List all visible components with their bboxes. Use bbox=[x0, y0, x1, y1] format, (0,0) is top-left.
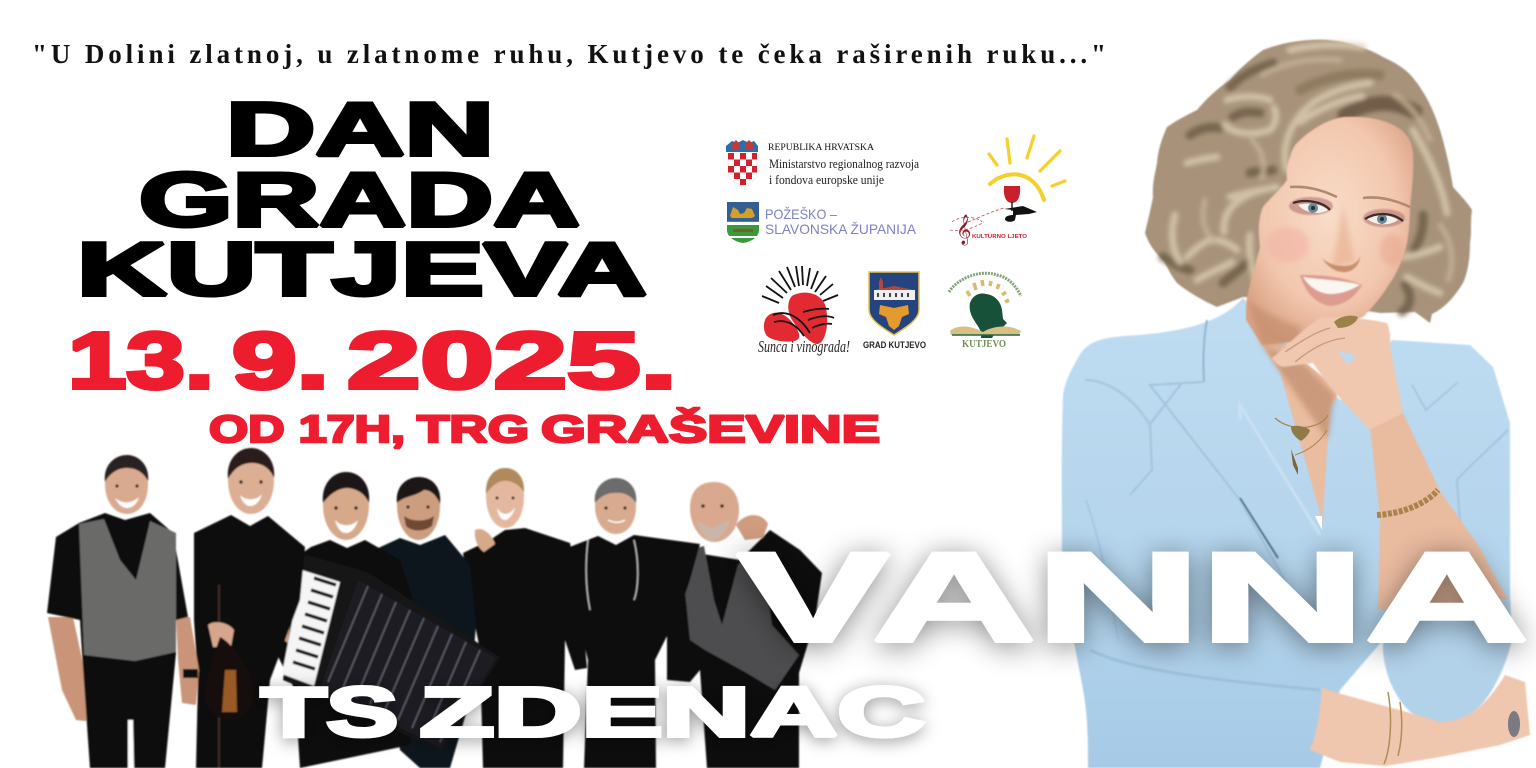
headline: TS ZDENAC: ZDENAC bbox=[420, 673, 925, 751]
logo: Republika Hrvatska: REPUBLIKA HRVATSKA bbox=[768, 143, 874, 153]
folded elbow sleeve bbox=[1383, 600, 1512, 724]
finger ring bbox=[1508, 711, 1520, 737]
logo: Narodna knjižnica i čitaonica Kutjevo bbox=[949, 273, 1021, 350]
headline: TS ZDENAC: TS bbox=[261, 673, 398, 751]
forearm bbox=[1370, 413, 1508, 610]
white top bbox=[1315, 516, 1322, 530]
logo: Republika Hrvatska: Ministarstvo regionalnog razvoja bbox=[769, 157, 919, 171]
lower forearm bbox=[1310, 675, 1530, 766]
title: Dan Grada Kutjeva: KUTJEVA bbox=[77, 227, 647, 311]
hair curls bbox=[1163, 45, 1452, 312]
date: 13. bbox=[68, 316, 214, 405]
lower jewellery bbox=[1384, 692, 1402, 764]
musician 1 bbox=[47, 455, 199, 768]
time and place: GRAŠEVINE bbox=[541, 406, 880, 451]
hand bbox=[1272, 317, 1403, 430]
logo: Kulturno ljeto: KULTURNO LJETO bbox=[972, 234, 1028, 240]
logo: Republika Hrvatska: i fondova europske unije bbox=[769, 173, 884, 187]
logo: Požeško-slavonska županija: SLAVONSKA ŽUPANIJA bbox=[765, 221, 917, 237]
face bbox=[1246, 117, 1413, 345]
logo: Grad Kutjevo bbox=[863, 272, 926, 351]
time and place: OD 17H, bbox=[209, 409, 405, 451]
logo: Požeško-slavonska županija bbox=[727, 202, 917, 243]
logo: Kulturno ljeto bbox=[950, 136, 1065, 246]
time and place: TRG bbox=[417, 409, 529, 451]
blue gap in hand bbox=[1337, 350, 1356, 365]
musician 6 bbox=[567, 478, 700, 768]
title: Dan Grada Kutjeva: GRADA bbox=[139, 158, 580, 243]
date: 9. bbox=[232, 316, 329, 405]
finger lines bbox=[1285, 328, 1345, 362]
logo: Grad Kutjevo: GRAD KUTJEVO bbox=[863, 340, 926, 351]
logo: Kulturno ljeto: 𝄞 bbox=[956, 214, 971, 246]
logo: Narodna knjižnica i čitaonica Kutjevo: KUTJEVO bbox=[962, 339, 1006, 350]
time and place bbox=[209, 406, 880, 451]
title: Dan Grada Kutjeva: DAN bbox=[226, 87, 494, 171]
singer photo: Vanna bbox=[1062, 40, 1530, 768]
musician 3 with accordion bbox=[262, 472, 500, 768]
hair bbox=[1145, 40, 1472, 323]
bracelet bbox=[1377, 490, 1438, 515]
jacket folds bbox=[1085, 320, 1508, 690]
logo: Požeško-slavonska županija: POŽEŠKO – bbox=[765, 206, 837, 222]
title: Dan Grada Kutjeva bbox=[77, 87, 647, 311]
chest bbox=[1247, 317, 1340, 528]
nose bbox=[1322, 256, 1360, 272]
logo: Sunca i vinograda bbox=[758, 266, 850, 356]
accordion bbox=[282, 553, 500, 752]
date bbox=[68, 316, 677, 405]
band photo: TS Zdenac bbox=[47, 448, 822, 768]
necklace bbox=[1275, 415, 1328, 475]
violin bbox=[205, 585, 254, 768]
logo: Republika Hrvatska bbox=[726, 140, 919, 187]
ring bbox=[1334, 316, 1358, 328]
mouth bbox=[1300, 275, 1362, 306]
musician 5 bbox=[463, 468, 587, 768]
headline: TS ZDENAC bbox=[261, 673, 925, 751]
musician 7 bbox=[667, 482, 822, 768]
musician 2 bbox=[194, 448, 305, 768]
logo: Sunca i vinograda: Sunca i vinograda! bbox=[758, 337, 850, 356]
blazer bbox=[1062, 298, 1510, 768]
brows and eyes bbox=[1289, 187, 1410, 227]
logos bbox=[726, 136, 1065, 356]
quote heading: "U Dolini zlatnoj, u zlatnome ruhu, Kutjevo te čeka raširenih ruku..." bbox=[32, 39, 1106, 69]
headline: VANNA: VANNA bbox=[737, 526, 1529, 668]
neck shadow bbox=[1262, 345, 1335, 440]
musician 4 bbox=[374, 477, 476, 768]
face shading bbox=[1248, 205, 1404, 345]
date: 2025. bbox=[347, 316, 677, 405]
